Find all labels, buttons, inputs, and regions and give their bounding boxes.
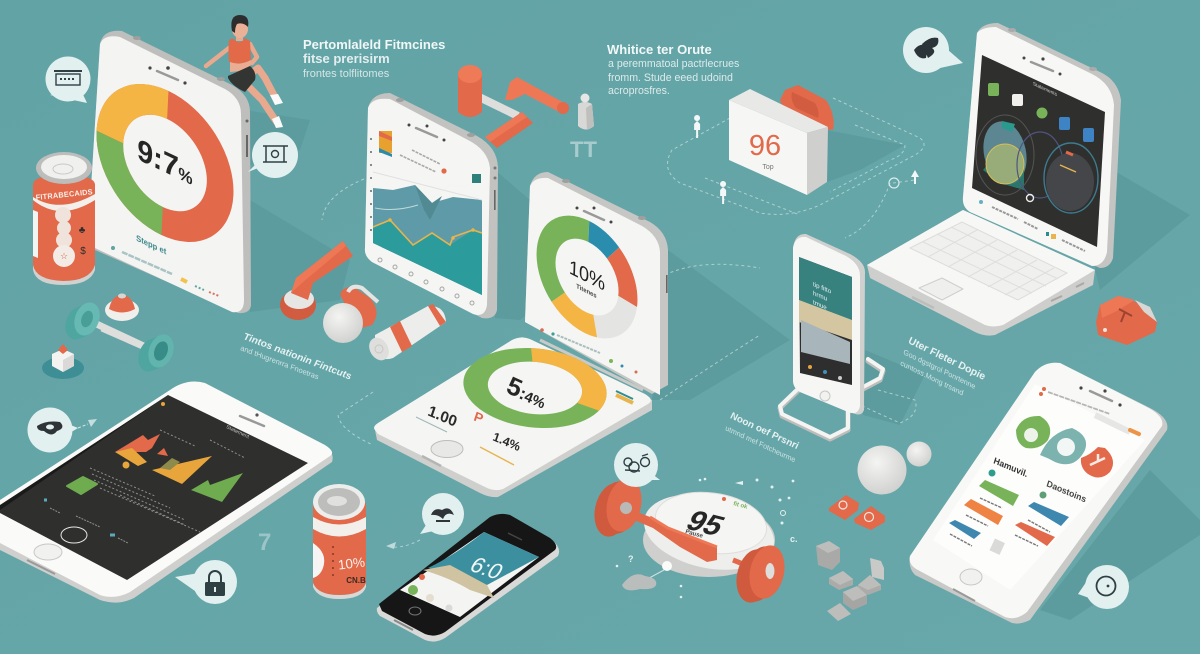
confetti around device: c. (790, 534, 798, 544)
tablet: dark dashboard (0, 382, 333, 603)
block: 96 card: 96 (749, 130, 781, 162)
fitness tracker device: 95: fit ok (732, 501, 749, 511)
base of folded phone: P (472, 409, 485, 426)
heading: white ter orute: a peremmatoal pactrlecrues (608, 58, 739, 70)
orange dome weight (105, 294, 139, 321)
laptop bottom label (979, 200, 1085, 251)
speech bubble: dark oval icon (28, 408, 97, 452)
energy drink can: ♣ (79, 225, 86, 236)
base of folded phone (374, 322, 653, 497)
heading: personalized fitness (303, 37, 445, 80)
wire stand (780, 359, 883, 439)
italic caption: noon oef: Noon oef Prsnri (729, 410, 800, 452)
energy drink can: FITRABECAIDS (35, 187, 93, 202)
speech bubble: tray icon (46, 56, 90, 103)
laptop (867, 23, 1121, 336)
orange hammer tool (458, 65, 569, 148)
laptop screen panel (963, 23, 1121, 268)
phone: 10% donut folded onto base (374, 172, 668, 497)
speech bubble: lock icon (175, 560, 237, 604)
small phone on stand (780, 234, 883, 439)
ground shadows (245, 110, 1200, 620)
tablet bottom controls (44, 500, 128, 543)
small bottle (578, 94, 594, 130)
phone: 9:7% donut (88, 31, 251, 313)
app lists: Daostoins (1045, 478, 1088, 504)
fitness tracker device: 95: Pause (684, 528, 704, 540)
white balls (858, 442, 932, 494)
tablet: dark dashboard: Statement (225, 424, 250, 441)
base of folded phone: 5:4% (503, 372, 551, 414)
phone: area chart (365, 93, 498, 318)
orange dumbbell bar (590, 475, 789, 606)
speech bubble: frame icon (248, 132, 298, 178)
small phone: 6:0 (377, 514, 559, 642)
legend on phone: Stepp et (136, 232, 166, 257)
route figures (694, 115, 919, 204)
heading: personalized fitness: frontes tolflitomes (303, 68, 390, 80)
speech bubble: cloud icon (420, 493, 464, 535)
energy drink can: $ (80, 246, 86, 257)
dashed route lines (322, 98, 924, 547)
italic caption: uter fleter: Uter Fleter Dopie (907, 335, 986, 383)
rolled white cylinder (365, 304, 446, 364)
heading: white ter orute (607, 42, 739, 97)
laptop screen panel: Statements (1033, 81, 1057, 98)
speech bubble: dark leaf icon (903, 27, 963, 73)
energy drink can: ☆ (60, 251, 68, 261)
heading: personalized fitness: Pertomlaleld Fitmcines (303, 37, 445, 52)
heading: white ter orute: acroprosfres. (608, 85, 670, 97)
donut chart: 5:4% (417, 322, 653, 454)
donut chart: 10% (527, 184, 647, 370)
mini colored badge (379, 131, 392, 157)
small phone on stand: hrmu (813, 290, 827, 303)
donut chart: 10%: 10% (569, 256, 606, 296)
base of folded phone: 1.00 (426, 403, 459, 431)
italic caption: tintos: Tintos nationin Fintcuts (242, 331, 353, 383)
block: 96 card (729, 85, 834, 195)
speech bubble: clock icon (1078, 565, 1129, 609)
person sitting on phone (206, 15, 283, 128)
italic caption: noon oef: utmnd mef Fotcheurme (724, 423, 796, 464)
orange handle tool (280, 241, 353, 320)
speech bubble: bike icon (614, 443, 660, 487)
donut chart: 9:7% (107, 79, 223, 247)
orange case (1096, 296, 1157, 345)
glyph mark: 7 (258, 529, 271, 556)
can: 10%: 10% (337, 554, 366, 573)
area chart (373, 172, 482, 295)
app icons (988, 83, 1094, 142)
app drop icons (1016, 416, 1113, 478)
small phone: 6:0: 6:0 (465, 553, 508, 584)
small phone on stand: tmue (813, 299, 827, 312)
legend on fold (540, 328, 638, 374)
can: 10% (313, 484, 366, 599)
gray blocks (816, 541, 884, 621)
dashed arrow to can (386, 542, 396, 549)
app lists: Hamuvil. (992, 455, 1029, 479)
italic caption: tintos: and tHugrenrra Fnoetras (239, 343, 320, 382)
donut chart: 10%: Titenes (576, 283, 597, 300)
energy drink can (33, 152, 95, 285)
heading: white ter orute: Whitice ter Orute (607, 42, 712, 57)
small phone on stand: tip fitto (813, 281, 831, 296)
italic caption: uter fleter: cuntoss.Mong trsand (899, 358, 964, 398)
tablet text rows (90, 430, 245, 532)
italic caption: uter fleter: Goo dgstgrol Ponrtenne (902, 347, 976, 391)
base of folded phone: 1.4% (491, 430, 522, 454)
heading: personalized fitness: fitse prerisirm (303, 51, 390, 66)
cube on teal plate (42, 344, 84, 379)
keyboard (910, 222, 1067, 300)
donut chart: 9:7%: 9:7% (136, 132, 194, 192)
app lists (949, 455, 1088, 555)
laptop base (867, 210, 1095, 336)
teal dumbbell (61, 299, 178, 375)
heading: white ter orute: fromm. Stude eeed udoind (608, 72, 733, 84)
right phone: app screen (910, 363, 1167, 624)
glyph mark: TT (570, 137, 597, 162)
tablet charts (115, 434, 243, 502)
fitness tracker device: 95 (622, 483, 781, 590)
italic caption: uter fleter (899, 335, 986, 398)
kettlebell and white ball (323, 286, 378, 343)
can: 10%: CN.B (346, 576, 366, 585)
confetti around device (616, 478, 798, 598)
orange tiles (829, 495, 885, 530)
circular screen charts (976, 115, 1098, 213)
confetti around device: ? (628, 554, 634, 564)
fitness tracker device: 95: 95 (680, 506, 730, 542)
block: 96 card: Top (762, 164, 774, 171)
